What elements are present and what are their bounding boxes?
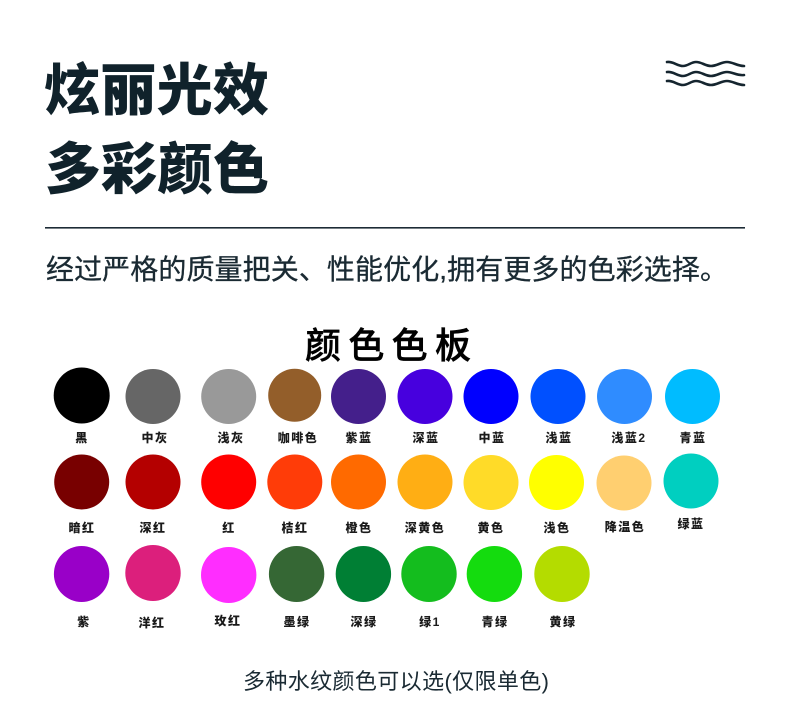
footer note: 多种水纹颜色可以选(仅限单色) [243, 669, 549, 694]
swatch: 浅蓝 [530, 369, 586, 445]
swatch: 黄色 [464, 455, 518, 535]
swatch: 橙色 [331, 454, 386, 535]
swatch: 黄色: 黄色 [477, 520, 505, 535]
swatch: 紫 [54, 546, 109, 629]
swatch: 暗红 [54, 454, 109, 535]
swatch: 绿蓝 [664, 454, 718, 531]
swatch: 洋红 [125, 545, 181, 630]
swatch: 紫蓝: 紫蓝 [345, 430, 373, 445]
swatch: 咖啡色: 咖啡色 [278, 430, 318, 445]
swatch: 红 [201, 454, 256, 535]
swatch: 深红: 深红 [139, 520, 167, 535]
swatch: 黄绿 [534, 546, 590, 629]
swatch: 浅蓝2: 浅蓝2 [611, 430, 647, 445]
swatch: 深黄色: 深黄色 [405, 520, 445, 535]
swatch: 青绿 [467, 546, 522, 629]
swatch: 绿1 [401, 546, 457, 629]
swatch: 中蓝: 中蓝 [478, 430, 506, 445]
swatch: 浅蓝: 浅蓝 [545, 430, 573, 445]
swatch: 中灰 [126, 369, 180, 445]
swatch: 黑 [54, 368, 110, 445]
swatch: 玫红: 玫红 [214, 613, 242, 628]
swatch: 青蓝 [665, 369, 720, 445]
title: 多彩颜色 [45, 138, 269, 201]
swatch: 深红 [126, 454, 180, 535]
swatch: 深黄色 [398, 454, 452, 535]
icon: water waves [667, 62, 744, 85]
swatch: 咖啡色 [268, 369, 321, 445]
swatch: 深绿: 深绿 [350, 614, 378, 629]
divider line [45, 227, 745, 229]
swatch: 墨绿: 墨绿 [283, 614, 311, 629]
swatch: 浅蓝2 [597, 369, 652, 445]
swatch: 桔红: 桔红 [281, 520, 309, 535]
palette heading: 颜色色板 [305, 325, 471, 366]
title [44, 59, 269, 201]
swatch: 深蓝: 深蓝 [412, 430, 440, 445]
swatch: 青蓝: 青蓝 [679, 430, 707, 445]
swatch: 深绿 [336, 546, 391, 629]
swatch: 黄绿: 黄绿 [549, 614, 577, 629]
swatch: 浅灰: 浅灰 [217, 430, 245, 445]
swatch: 浅色: 浅色 [543, 520, 571, 535]
swatch: 降温色: 降温色 [605, 519, 645, 534]
swatch: 玫红 [201, 547, 256, 628]
swatch: 绿蓝: 绿蓝 [677, 516, 705, 531]
title: 炫丽光效 [44, 59, 269, 122]
swatch: 降温色 [596, 456, 652, 534]
swatch: 墨绿 [269, 546, 324, 629]
color swatch grid [54, 368, 720, 630]
swatch: 深蓝 [398, 369, 452, 445]
swatch: 桔红 [267, 454, 322, 535]
swatch: 洋红: 洋红 [138, 615, 166, 630]
swatch: 紫蓝 [331, 369, 386, 445]
swatch: 黑: 黑 [75, 431, 89, 445]
subtitle text: 经过严格的质量把关、性能优化,拥有更多的色彩选择。 [46, 254, 728, 285]
swatch: 绿1: 绿1 [419, 614, 441, 629]
swatch: 中灰: 中灰 [141, 430, 169, 445]
swatch: 红: 红 [222, 520, 236, 535]
swatch: 浅色 [529, 455, 584, 535]
swatch: 浅灰 [201, 369, 256, 445]
swatch: 橙色: 橙色 [345, 520, 373, 535]
swatch: 暗红: 暗红 [68, 520, 96, 535]
swatch: 青绿: 青绿 [481, 614, 509, 629]
swatch: 中蓝 [464, 369, 518, 445]
swatch: 紫: 紫 [77, 614, 91, 629]
